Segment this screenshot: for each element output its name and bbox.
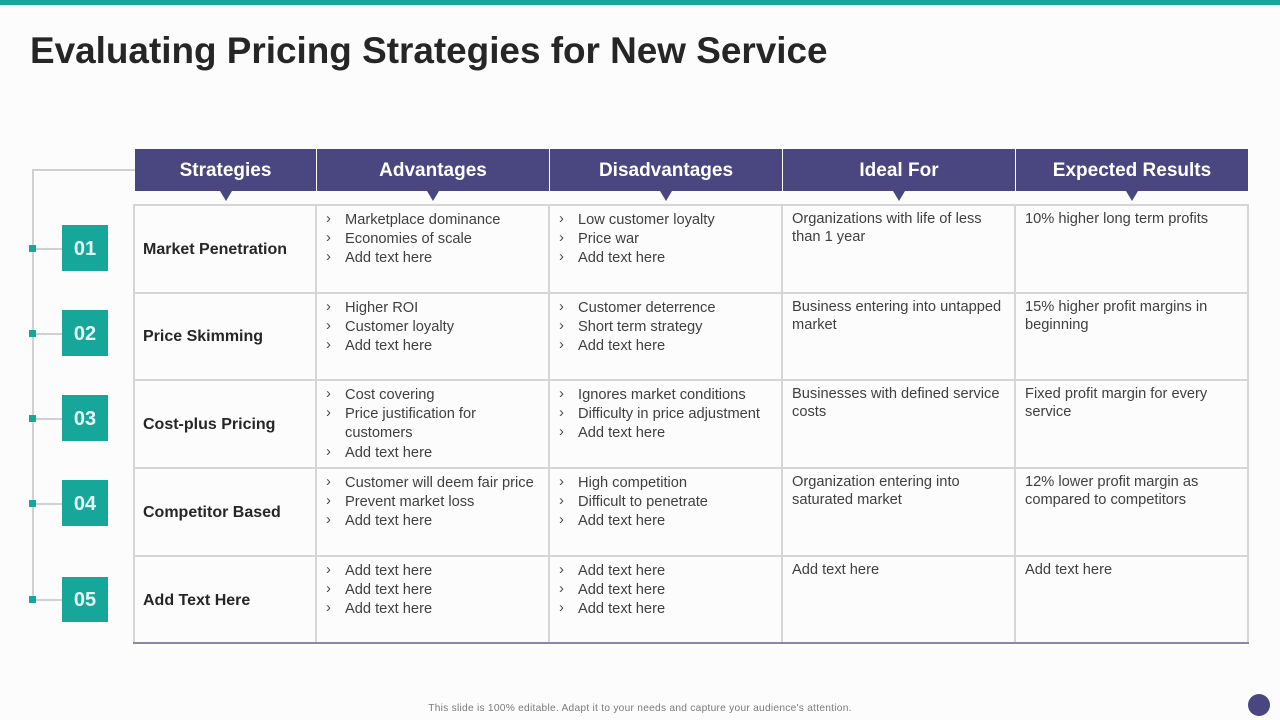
marker 2 xyxy=(29,330,36,337)
number badge 01: 01 xyxy=(74,238,96,260)
header: Strategies: Strategies xyxy=(180,160,271,181)
disadvantages row 2: Short term strategy xyxy=(578,319,702,335)
expected results row 4 xyxy=(1025,474,1198,508)
strategy: Market Penetration: Market Penetration xyxy=(143,241,287,258)
disadvantages row 3 xyxy=(560,387,760,441)
timeline connector xyxy=(32,169,135,601)
disadvantages row 2 xyxy=(560,300,716,354)
advantages row 1: Economies of scale xyxy=(345,231,472,247)
ideal for row 1: than 1 year xyxy=(792,229,865,245)
ideal for row 3: costs xyxy=(792,404,826,420)
advantages row 3: Add text here xyxy=(345,445,432,461)
footer note: This slide is 100% editable. Adapt it to your needs and capture your audience's attention. xyxy=(428,703,852,714)
number badge 05: 05 xyxy=(74,589,96,611)
disadvantages row 2: Add text here xyxy=(578,338,665,354)
number badge 03 xyxy=(62,395,108,441)
header: Ideal For xyxy=(783,149,1015,191)
ideal for row 5: Add text here xyxy=(792,562,879,578)
advantages row 2: Customer loyalty xyxy=(345,319,454,335)
header: Expected Results: Expected Results xyxy=(1053,160,1211,181)
advantages row 4: Add text here xyxy=(345,513,432,529)
header: Strategies xyxy=(135,149,316,191)
ideal for row 4: Organization entering into xyxy=(792,474,960,490)
ideal for row 3: Businesses with defined service xyxy=(792,386,1000,402)
marker 1 xyxy=(29,245,36,252)
strategy: Add Text Here: Add Text Here xyxy=(143,592,250,609)
advantages row 5: Add text here xyxy=(345,601,432,617)
strategy: Price Skimming: Price Skimming xyxy=(143,328,263,345)
ideal for row 2: Business entering into untapped xyxy=(792,299,1001,315)
header: Advantages: Advantages xyxy=(379,160,487,181)
number badge 02: 02 xyxy=(74,323,96,345)
expected results row 2 xyxy=(1025,299,1207,333)
ideal for row 2: market xyxy=(792,317,837,333)
disadvantages row 2: Customer deterrence xyxy=(578,300,716,316)
disadvantages row 1: Price war xyxy=(578,231,639,247)
disadvantages row 3: Add text here xyxy=(578,425,665,441)
advantages row 1 xyxy=(326,212,500,266)
number badge 03: 03 xyxy=(74,408,96,430)
ideal for row 2 xyxy=(792,299,1001,333)
advantages row 3: Price justification for xyxy=(345,406,476,422)
header: Disadvantages xyxy=(550,149,782,191)
advantages row 1: Marketplace dominance xyxy=(345,212,500,228)
marker 3 xyxy=(29,415,36,422)
advantages row 4: Prevent market loss xyxy=(345,494,474,510)
advantages row 4: Customer will deem fair price xyxy=(345,475,534,491)
disadvantages row 5: Add text here xyxy=(578,563,665,579)
expected results row 4: 12% lower profit margin as xyxy=(1025,474,1198,490)
number badge 01 xyxy=(62,225,108,271)
expected results row 3: service xyxy=(1025,404,1071,420)
disadvantages row 5 xyxy=(560,563,665,617)
expected results row 4: compared to competitors xyxy=(1025,492,1186,508)
advantages row 4 xyxy=(326,475,534,529)
header: Ideal For: Ideal For xyxy=(859,160,939,181)
advantages row 2: Add text here xyxy=(345,338,432,354)
marker 4 xyxy=(29,500,36,507)
disadvantages row 3: Difficulty in price adjustment xyxy=(578,406,760,422)
ideal for row 1: Organizations with life of less xyxy=(792,211,982,227)
header: Expected Results xyxy=(1016,149,1248,191)
disadvantages row 1 xyxy=(560,212,715,266)
number badge 02 xyxy=(62,310,108,356)
header: Disadvantages: Disadvantages xyxy=(599,160,733,181)
advantages row 3 xyxy=(326,387,476,461)
disadvantages row 1: Add text here xyxy=(578,250,665,266)
disadvantages row 4 xyxy=(560,475,708,529)
ideal for row 4: saturated market xyxy=(792,492,902,508)
advantages row 3: customers xyxy=(345,425,413,441)
ideal for row 1 xyxy=(792,211,982,245)
page marker dot xyxy=(1248,694,1270,716)
disadvantages row 5: Add text here xyxy=(578,582,665,598)
ideal for row 3 xyxy=(792,386,1000,420)
expected results row 2: beginning xyxy=(1025,317,1089,333)
advantages row 5: Add text here xyxy=(345,563,432,579)
advantages row 5: Add text here xyxy=(345,582,432,598)
number badge 05 xyxy=(62,577,108,622)
disadvantages row 4: Add text here xyxy=(578,513,665,529)
top accent bar xyxy=(0,0,1280,5)
advantages row 3: Cost covering xyxy=(345,387,435,403)
header: Advantages xyxy=(317,149,549,191)
advantages row 5 xyxy=(326,563,432,617)
advantages row 2: Higher ROI xyxy=(345,300,418,316)
number badge 04: 04 xyxy=(74,493,96,515)
disadvantages row 4: High competition xyxy=(578,475,687,491)
table grid xyxy=(133,204,1249,644)
advantages row 1: Add text here xyxy=(345,250,432,266)
strategy: Competitor Based: Competitor Based xyxy=(143,504,281,521)
expected results row 2: 15% higher profit margins in xyxy=(1025,299,1207,315)
expected results row 3 xyxy=(1025,386,1208,420)
expected results row 5: Add text here xyxy=(1025,562,1112,578)
marker 5 xyxy=(29,596,36,603)
disadvantages row 4: Difficult to penetrate xyxy=(578,494,708,510)
ideal for row 4 xyxy=(792,474,960,508)
expected results row 1: 10% higher long term profits xyxy=(1025,211,1208,227)
strategy: Cost-plus Pricing: Cost-plus Pricing xyxy=(143,416,275,433)
disadvantages row 5: Add text here xyxy=(578,601,665,617)
expected results row 3: Fixed profit margin for every xyxy=(1025,386,1207,402)
title: Evaluating Pricing Strategies for New Service xyxy=(30,30,828,71)
advantages row 2 xyxy=(326,300,454,354)
disadvantages row 1: Low customer loyalty xyxy=(578,212,715,228)
disadvantages row 3: Ignores market conditions xyxy=(578,387,746,403)
number badge 04 xyxy=(62,480,108,526)
